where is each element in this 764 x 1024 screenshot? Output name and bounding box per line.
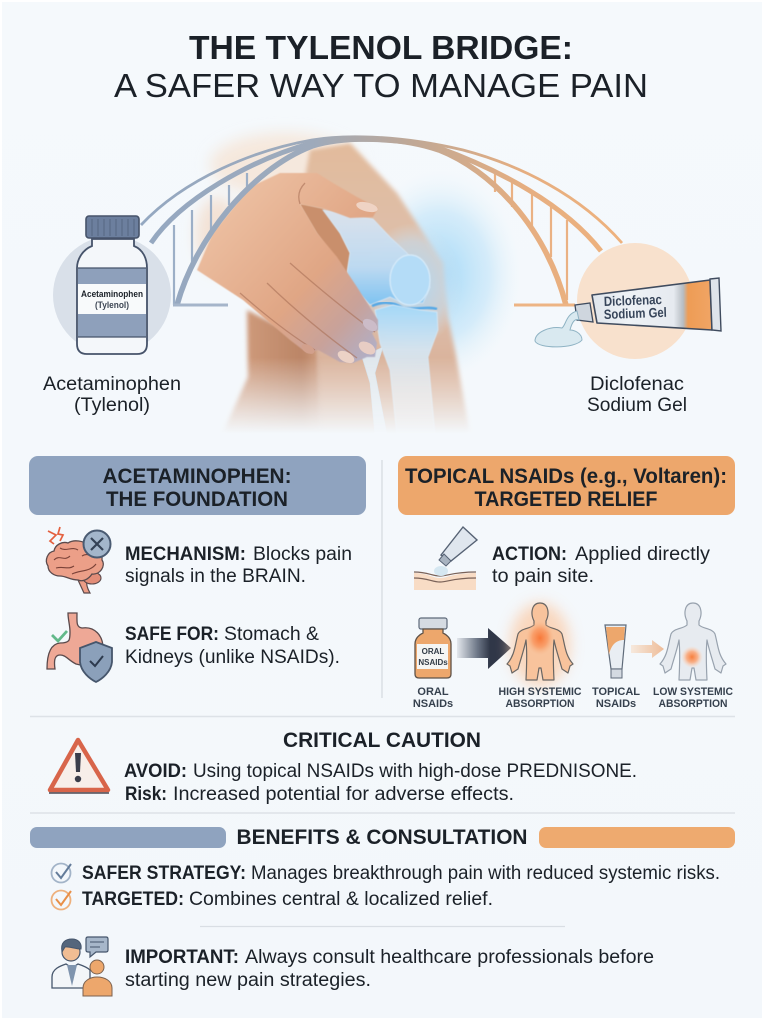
bridge arcs xyxy=(141,137,622,305)
text: safer strategy: SAFER STRATEGY: xyxy=(82,863,246,884)
label: Diclofenac: Diclofenac xyxy=(590,374,684,395)
label: oral nsaids: ORAL xyxy=(417,686,449,698)
section: benefits and consultation xyxy=(30,826,735,996)
label: low systemic absorption xyxy=(653,686,733,710)
text: safer strategy: Manages breakthrough pain with reduced systemic risks. xyxy=(251,863,720,884)
label: high systemic absorption: HIGH SYSTEMIC xyxy=(498,686,582,698)
title: THE TYLENOL BRIDGE: xyxy=(189,29,573,66)
icon: Diclofenac gel tube xyxy=(535,243,721,359)
label: low systemic absorption: ABSORPTION xyxy=(658,698,728,710)
text: important: IMPORTANT: xyxy=(125,947,239,968)
panel: Acetaminophen xyxy=(29,456,366,682)
text: safe for: SAFE FOR: xyxy=(125,624,219,645)
icon: warning triangle xyxy=(49,740,109,793)
icon: Acetaminophen bottle: Acetaminophen xyxy=(81,289,143,299)
label: topical nsaids: NSAIDs xyxy=(596,698,636,710)
heading: topical nsaids: TOPICAL NSAIDs (e.g., Voltaren): xyxy=(405,465,727,488)
illustration: knee with hand xyxy=(196,133,522,435)
icon: Diclofenac gel tube: Sodium Gel xyxy=(604,305,667,322)
icon: oral NSAIDs bottle xyxy=(415,618,451,678)
heading: critical caution: CRITICAL CAUTION xyxy=(283,729,481,752)
icon: doctor and patient xyxy=(52,937,112,996)
title: A SAFER WAY TO MANAGE PAIN xyxy=(114,67,648,104)
heading: acetaminophen: THE FOUNDATION xyxy=(106,488,288,511)
text: mechanism: signals in the BRAIN. xyxy=(125,566,306,587)
text: avoid: Risk: xyxy=(125,784,167,805)
icon: Diclofenac gel tube: Diclofenac xyxy=(604,292,662,309)
text: important xyxy=(125,947,654,991)
text: avoid: Increased potential for adverse effects. xyxy=(173,784,514,805)
text: targeted: TARGETED: xyxy=(82,889,184,910)
icon: topical tube xyxy=(605,625,626,678)
heading: benefits and consultation xyxy=(30,826,735,849)
arrow: high absorption xyxy=(457,628,511,669)
text: safe for: Kidneys (unlike NSAIDs). xyxy=(125,647,340,668)
text: action xyxy=(492,544,711,587)
text: safe for xyxy=(125,624,340,668)
heading: acetaminophen xyxy=(29,456,366,515)
icon: tube on skin xyxy=(414,527,477,590)
icon: oral NSAIDs bottle: NSAIDs xyxy=(418,658,448,667)
text: mechanism: Blocks pain xyxy=(253,544,352,565)
text: action: Applied directly xyxy=(575,544,711,565)
heading: topical nsaids: TARGETED RELIEF xyxy=(474,488,658,511)
label: oral nsaids: NSAIDs xyxy=(413,698,453,710)
label: high systemic absorption: ABSORPTION xyxy=(506,698,575,710)
label: oral nsaids xyxy=(413,686,453,710)
label: high systemic absorption xyxy=(498,686,582,710)
label: low systemic absorption: LOW SYSTEMIC xyxy=(653,686,733,698)
icon: Acetaminophen bottle xyxy=(53,216,171,354)
text: action: to pain site. xyxy=(492,566,594,587)
icon: blue check xyxy=(52,864,71,882)
title xyxy=(114,29,648,104)
text: avoid: Using topical NSAIDs with high-dose PREDNISONE. xyxy=(193,761,637,782)
label: topical nsaids: TOPICAL xyxy=(592,686,640,698)
arrow: low absorption xyxy=(631,640,664,658)
panel: Topical NSAIDs xyxy=(398,456,735,710)
icon: stomach with shield xyxy=(47,613,112,682)
heading: benefits and consultation: BENEFITS & CONSULTATION xyxy=(236,826,528,849)
icon: brain xyxy=(46,527,110,593)
text: action: ACTION: xyxy=(492,544,567,565)
text: targeted: Combines central & localized relief. xyxy=(189,889,493,910)
text: important: Always consult healthcare professionals before xyxy=(245,947,654,968)
text: important: starting new pain strategies. xyxy=(125,970,371,991)
text: mechanism: MECHANISM: xyxy=(125,544,246,565)
label: Diclofenac: Sodium Gel xyxy=(587,395,687,416)
icon: Acetaminophen bottle: (Tylenol) xyxy=(95,300,129,310)
text: avoid xyxy=(124,761,637,805)
label: topical nsaids xyxy=(592,686,640,710)
heading: topical nsaids xyxy=(398,456,735,515)
label: Acetaminophen xyxy=(43,374,181,416)
icon: body high absorption xyxy=(507,603,573,687)
heading: acetaminophen: ACETAMINOPHEN: xyxy=(102,465,292,488)
icon: orange check xyxy=(52,890,71,910)
label: Acetaminophen: (Tylenol) xyxy=(74,395,150,416)
text: mechanism xyxy=(125,544,352,587)
icon: oral NSAIDs bottle: ORAL xyxy=(422,647,444,656)
text: avoid: AVOID: xyxy=(124,761,187,782)
icon: body low absorption xyxy=(660,603,726,680)
label: Acetaminophen: Acetaminophen xyxy=(43,374,181,395)
section: critical caution xyxy=(49,729,637,805)
label: Diclofenac xyxy=(587,374,687,416)
text: safe for: Stomach & xyxy=(224,624,319,645)
